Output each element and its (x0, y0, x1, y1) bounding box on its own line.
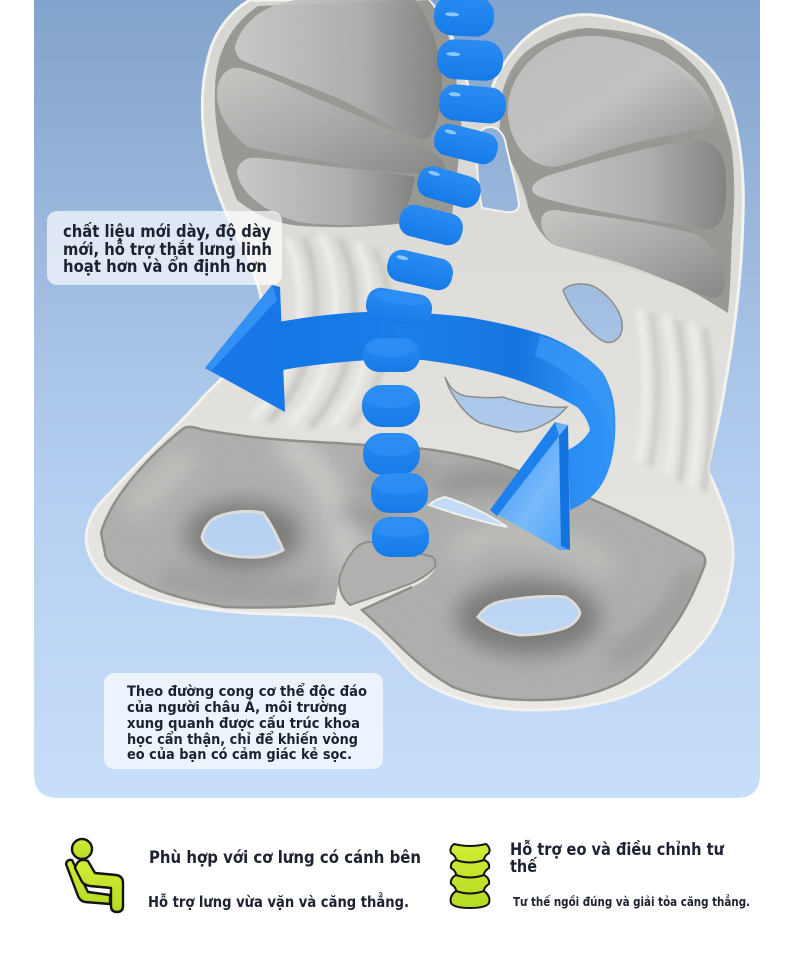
seat hole: left (202, 511, 283, 557)
feature 2 description: Tư thế ngồi đúng và giải tỏa căng thẳng. (513, 894, 750, 909)
cushion illustration (86, 0, 743, 715)
callout: material (47, 211, 282, 285)
icon: seated person (66, 839, 123, 912)
feature 1 description: Hỗ trợ lưng vừa vặn và căng thẳng. (148, 891, 409, 911)
right lobe mesh base (499, 28, 734, 313)
disc 6 (396, 202, 466, 248)
disc 8 (364, 286, 434, 328)
back ribs right (638, 312, 711, 490)
disc 11 (363, 433, 420, 475)
disc 7 (384, 247, 456, 293)
disc 13 (372, 517, 429, 557)
disc 2 (436, 38, 504, 82)
seat hole: centre slit (429, 497, 507, 527)
right lobe pad B (532, 140, 726, 229)
rotation arrow left head (205, 285, 285, 412)
disc 12 (371, 473, 428, 513)
left lobe mesh base (215, 0, 462, 227)
left lobe pad 2 (217, 68, 445, 174)
disc 1 (433, 0, 495, 38)
right pad texture (499, 28, 733, 313)
left pad texture (215, 0, 462, 227)
rotation arrow band (273, 312, 615, 510)
spine discs (362, 0, 507, 557)
callout: body curve: của người châu Á, môi trường (127, 699, 347, 716)
disc 10 (362, 385, 420, 427)
rotation arrow right head (490, 422, 570, 550)
callout: material: mới, hỗ trợ thắt lưng linh (63, 240, 272, 259)
feature 2 heading (510, 838, 725, 877)
seat centre wedge (339, 542, 436, 605)
feature 2 heading: thế (510, 856, 537, 877)
right lobe pad C (541, 210, 725, 297)
hole: crescent (445, 377, 567, 432)
icon: spine (450, 844, 490, 908)
left lobe pad 3 (237, 158, 415, 225)
arrow band highlight (535, 336, 613, 440)
callout: body curve (104, 673, 383, 769)
callout: body curve: Theo đường cong cơ thể độc đáo (127, 683, 367, 700)
hole: right back (563, 284, 622, 342)
back holes (445, 127, 622, 432)
callout: material: chất liệu mới dày, độ dày (63, 222, 271, 241)
seat mesh outline (101, 427, 705, 700)
callout: body curve: eo của bạn có cảm giác kẻ sọc. (127, 747, 352, 763)
back ribs left (255, 238, 390, 425)
feature 2 heading: Hỗ trợ eo và điều chỉnh tư (510, 838, 725, 860)
blue gradient panel (34, 0, 760, 798)
seat hole: right (478, 596, 580, 635)
feature 1 heading: Phù hợp với cơ lưng có cánh bên (149, 848, 421, 868)
hole: centre back (477, 127, 519, 212)
disc 4 (431, 121, 501, 167)
disc 3 (438, 83, 507, 125)
seat shading (130, 440, 695, 660)
disc 5 (414, 163, 484, 211)
seat mesh (102, 428, 704, 699)
callout: material: hoạt hơn và ổn định hơn (63, 257, 267, 276)
disc 9 (363, 338, 420, 372)
left lobe pad 1 (235, 0, 442, 140)
callout: body curve: học cẩn thận, chỉ để khiến vòng (127, 731, 358, 748)
cushion shell (86, 0, 743, 710)
callout: body curve: xung quanh được cấu trúc khoa (127, 715, 360, 732)
right lobe pad A (508, 36, 714, 167)
